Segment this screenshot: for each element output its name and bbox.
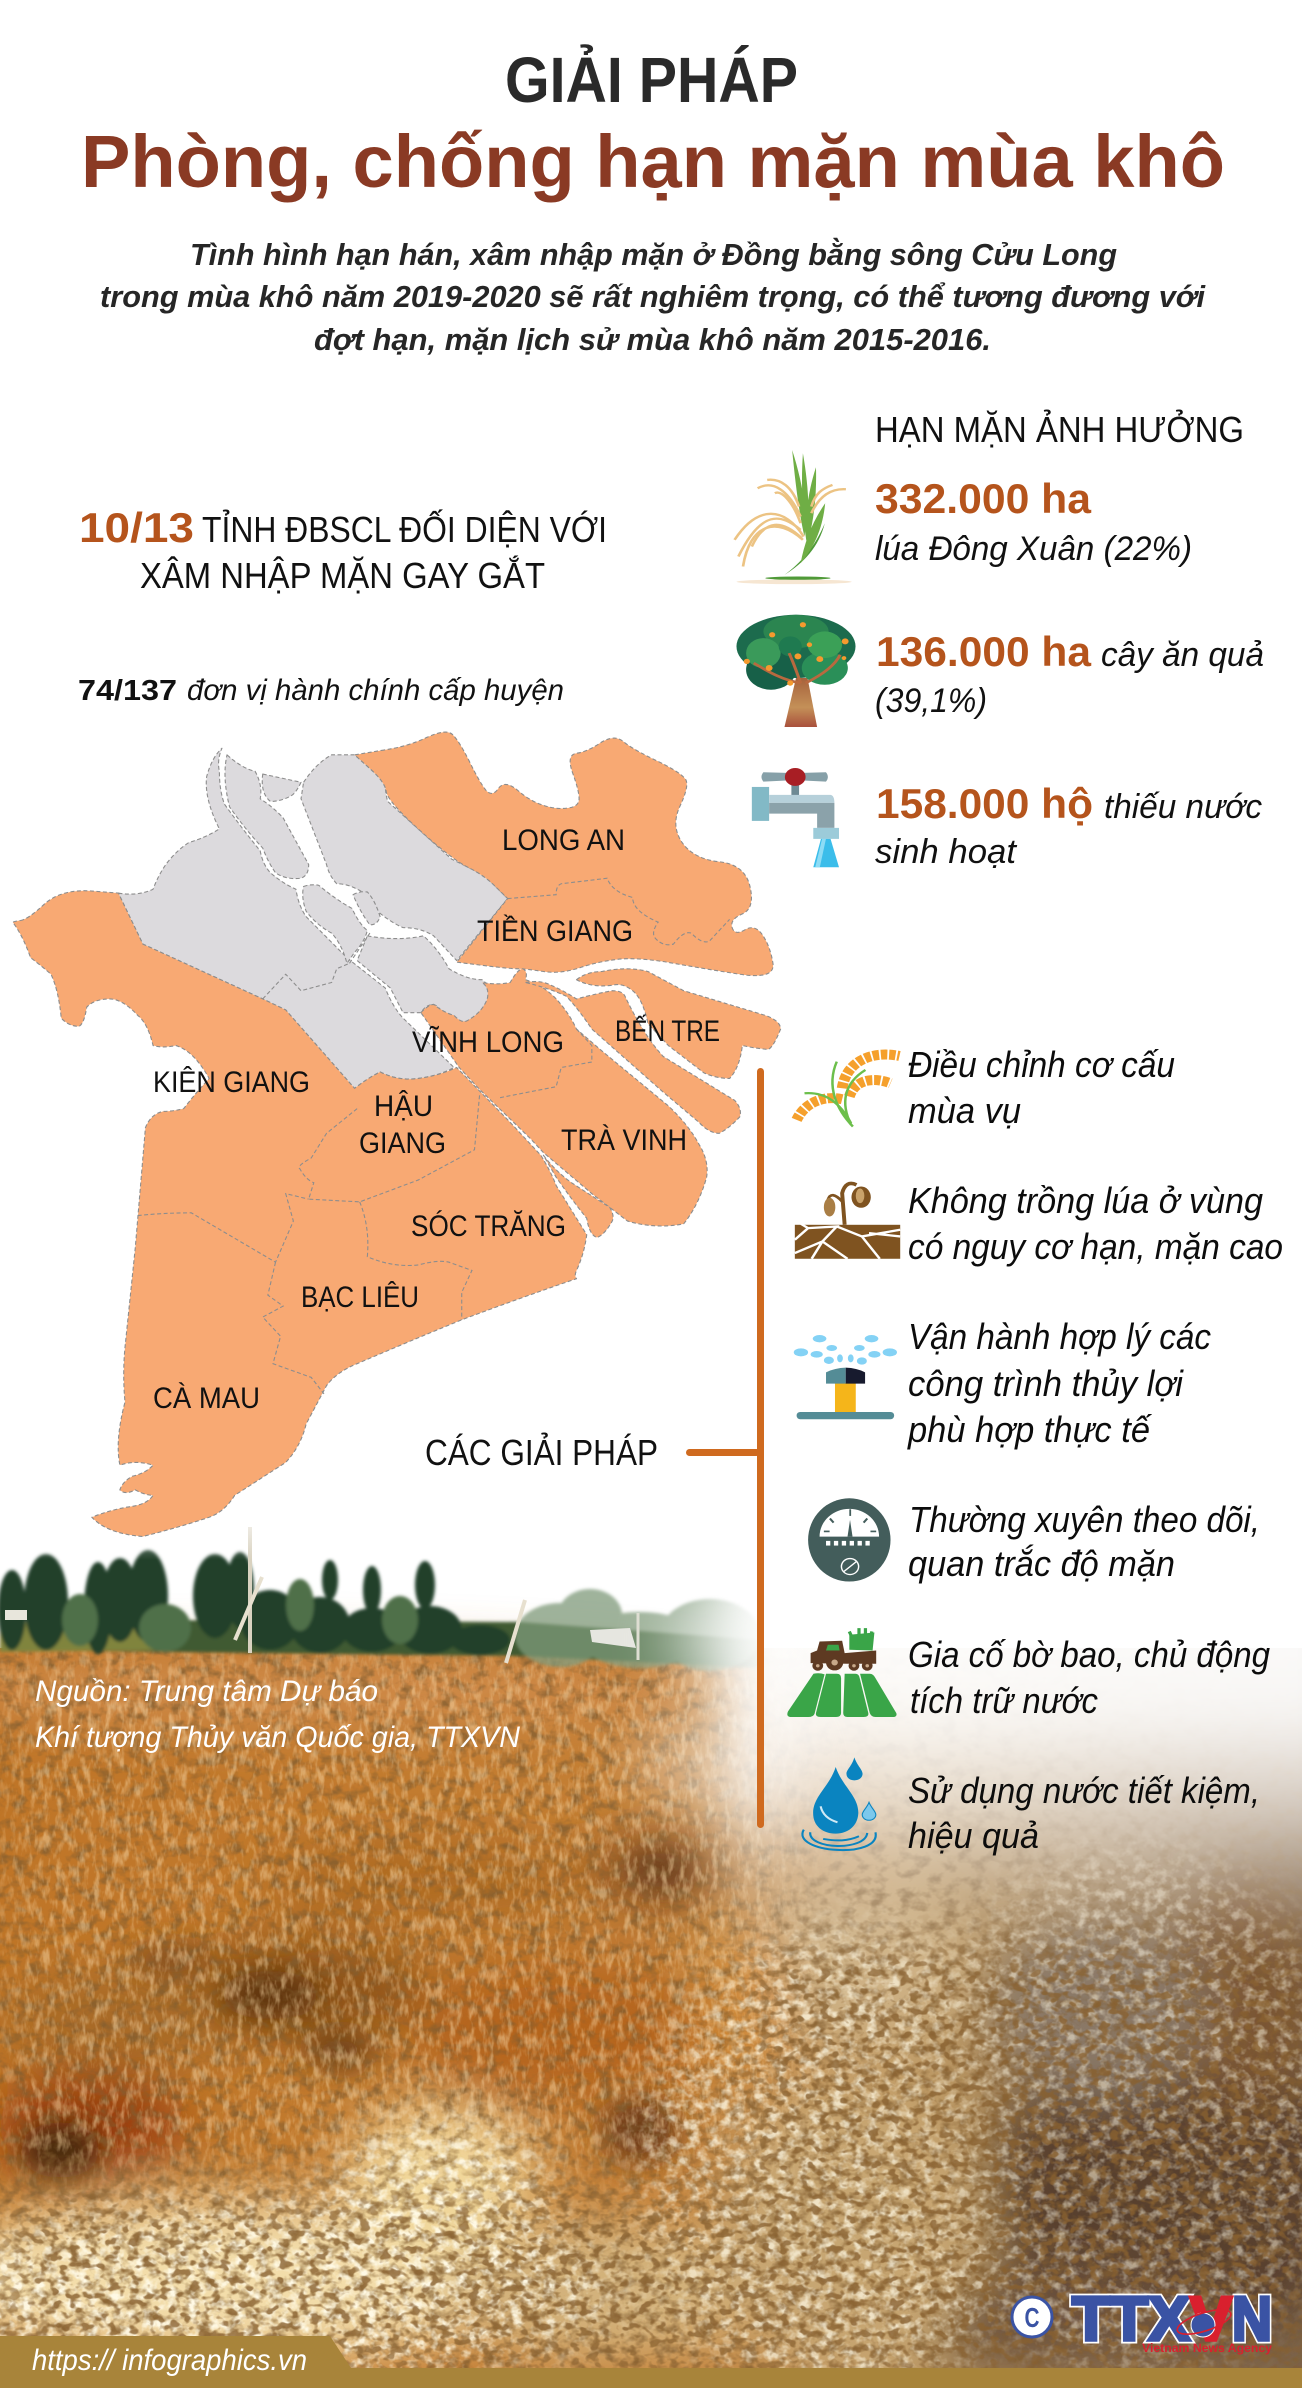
- logo: TTXVN: [1012, 2285, 1272, 2355]
- intro text: trong mùa khô năm 2019-2020 sẽ rất nghiêm trọng, có thể tương đương với: [100, 279, 1206, 314]
- map labels: [153, 824, 720, 1415]
- logo: TTXVN: TTX: [1072, 2285, 1190, 2354]
- callout: 10/13 provinces: [79, 504, 607, 596]
- solution: reinforce dykes, store water: [908, 1634, 1270, 1721]
- callout: 10/13 provinces: XÂM NHẬP MẶN GAY GẮT: [140, 554, 545, 596]
- intro text: [100, 236, 1206, 357]
- heading: affected by salinity: HẠN MẶN ẢNH HƯỞNG: [875, 408, 1244, 450]
- callout: 10/13 provinces: 10/13: [79, 504, 194, 551]
- callout: 74/137 districts: đơn vị hành chính cấp huyện: [187, 674, 564, 707]
- footer bar with url: https:// infographics.vn: [32, 2344, 307, 2377]
- map: Mekong Delta provinces: [13, 732, 781, 1536]
- stat: households: 158.000 hộ: [876, 780, 1093, 827]
- solution: operate irrigation works: phù hợp thực tế: [907, 1409, 1153, 1450]
- map labels: BẠC LIÊU: [301, 1281, 419, 1314]
- icon: rice plant: [735, 450, 852, 584]
- source note: Nguồn: Trung tâm Dự báo: [35, 1675, 378, 1708]
- callout: 74/137 districts: 74/137: [78, 675, 177, 707]
- icon: water drops: [802, 1757, 876, 1850]
- title: [81, 43, 1225, 203]
- callout: 10/13 provinces: TỈNH ĐBSCL ĐỐI DIỆN VỚI: [202, 508, 607, 550]
- solution: monitor salinity: [908, 1499, 1260, 1584]
- solution: adjust crop structure: mùa vụ: [908, 1090, 1021, 1131]
- stat: rice area: 332.000 ha: [875, 475, 1092, 522]
- title: Phòng, chống hạn mặn mùa khô: [81, 120, 1225, 203]
- icon: orange rice: [797, 1055, 899, 1127]
- stat: rice area: [875, 475, 1192, 568]
- map labels: SÓC TRĂNG: [411, 1210, 566, 1243]
- logo: TTXVN: TTX: [1072, 2285, 1190, 2354]
- logo: TTXVN: C: [1024, 2302, 1040, 2333]
- map labels: VĨNH LONG: [412, 1025, 564, 1059]
- map labels: HẬU: [374, 1090, 433, 1123]
- solution: no rice in risk areas: Không trồng lúa ở vùng: [908, 1180, 1263, 1221]
- icon: fruit tree: [736, 615, 856, 727]
- solution: no rice in risk areas: có nguy cơ hạn, mặn cao: [908, 1226, 1283, 1267]
- map labels: GIANG: [359, 1127, 446, 1160]
- icon: cracked soil and sprout: [795, 1183, 900, 1259]
- map labels: TRÀ VINH: [561, 1124, 687, 1157]
- logo: TTXVN: N: [1232, 2285, 1272, 2354]
- solution: operate irrigation works: Vận hành hợp lý các: [908, 1316, 1211, 1357]
- solution: monitor salinity: Thường xuyên theo dõi,: [909, 1499, 1260, 1540]
- solution: use water efficiently: hiệu quả: [908, 1815, 1039, 1856]
- map labels: TIỀN GIANG: [477, 914, 633, 948]
- treeline: [0, 1550, 760, 1671]
- source note: [35, 1675, 520, 1754]
- icon: sprinkler: [794, 1335, 897, 1419]
- icon: tractor and fields: [787, 1628, 897, 1717]
- solution: reinforce dykes, store water: tích trữ nước: [910, 1680, 1098, 1721]
- stat: households: thiếu nước: [1104, 788, 1262, 826]
- solution: adjust crop structure: Điều chỉnh cơ cấu: [908, 1044, 1175, 1085]
- heading: solutions: CÁC GIẢI PHÁP: [425, 1432, 658, 1473]
- background photo: parched field: [0, 1500, 1302, 2388]
- icon: salinity gauge: [808, 1498, 891, 1582]
- icon: water tap: [752, 768, 839, 867]
- stat: households: sinh hoạt: [875, 833, 1018, 871]
- solution: use water efficiently: Sử dụng nước tiết kiệm,: [908, 1770, 1260, 1811]
- map labels: CÀ MAU: [153, 1382, 260, 1415]
- stat: fruit tree area: 136.000 ha: [876, 628, 1092, 675]
- solution: reinforce dykes, store water: Gia cố bờ bao, chủ động: [908, 1634, 1270, 1675]
- stat: households: [875, 780, 1262, 871]
- logo: TTXVN: N: [1232, 2285, 1272, 2354]
- stat: fruit tree area: (39,1%): [875, 682, 987, 720]
- map labels: KIÊN GIANG: [153, 1066, 310, 1099]
- connector: solutions bracket: [686, 1068, 764, 1828]
- stat: fruit tree area: cây ăn quả: [1101, 636, 1264, 674]
- logo: TTXVN: Vietnam News Agency: [1142, 2341, 1272, 2355]
- intro text: đợt hạn, mặn lịch sử mùa khô năm 2015-2016.: [314, 322, 991, 357]
- solution: operate irrigation works: [907, 1316, 1211, 1450]
- solution: monitor salinity: quan trắc độ mặn: [908, 1543, 1175, 1584]
- source note: Khí tượng Thủy văn Quốc gia, TTXVN: [35, 1721, 520, 1754]
- stat: rice area: lúa Đông Xuân (22%): [875, 530, 1192, 568]
- stat: fruit tree area: [875, 628, 1264, 720]
- map labels: LONG AN: [502, 824, 625, 857]
- footer bar with url: [0, 2336, 1302, 2388]
- solution: no rice in risk areas: [908, 1180, 1283, 1267]
- logo: TTXVN: V: [1190, 2285, 1232, 2354]
- solution: operate irrigation works: công trình thủy lợi: [908, 1363, 1184, 1404]
- intro text: Tình hình hạn hán, xâm nhập mặn ở Đồng bằng sông Cửu Long: [190, 236, 1117, 272]
- solution: use water efficiently: [908, 1770, 1260, 1856]
- solution: adjust crop structure: [908, 1044, 1175, 1131]
- map labels: BẾN TRE: [615, 1014, 720, 1048]
- title: GIẢI PHÁP: [505, 43, 798, 116]
